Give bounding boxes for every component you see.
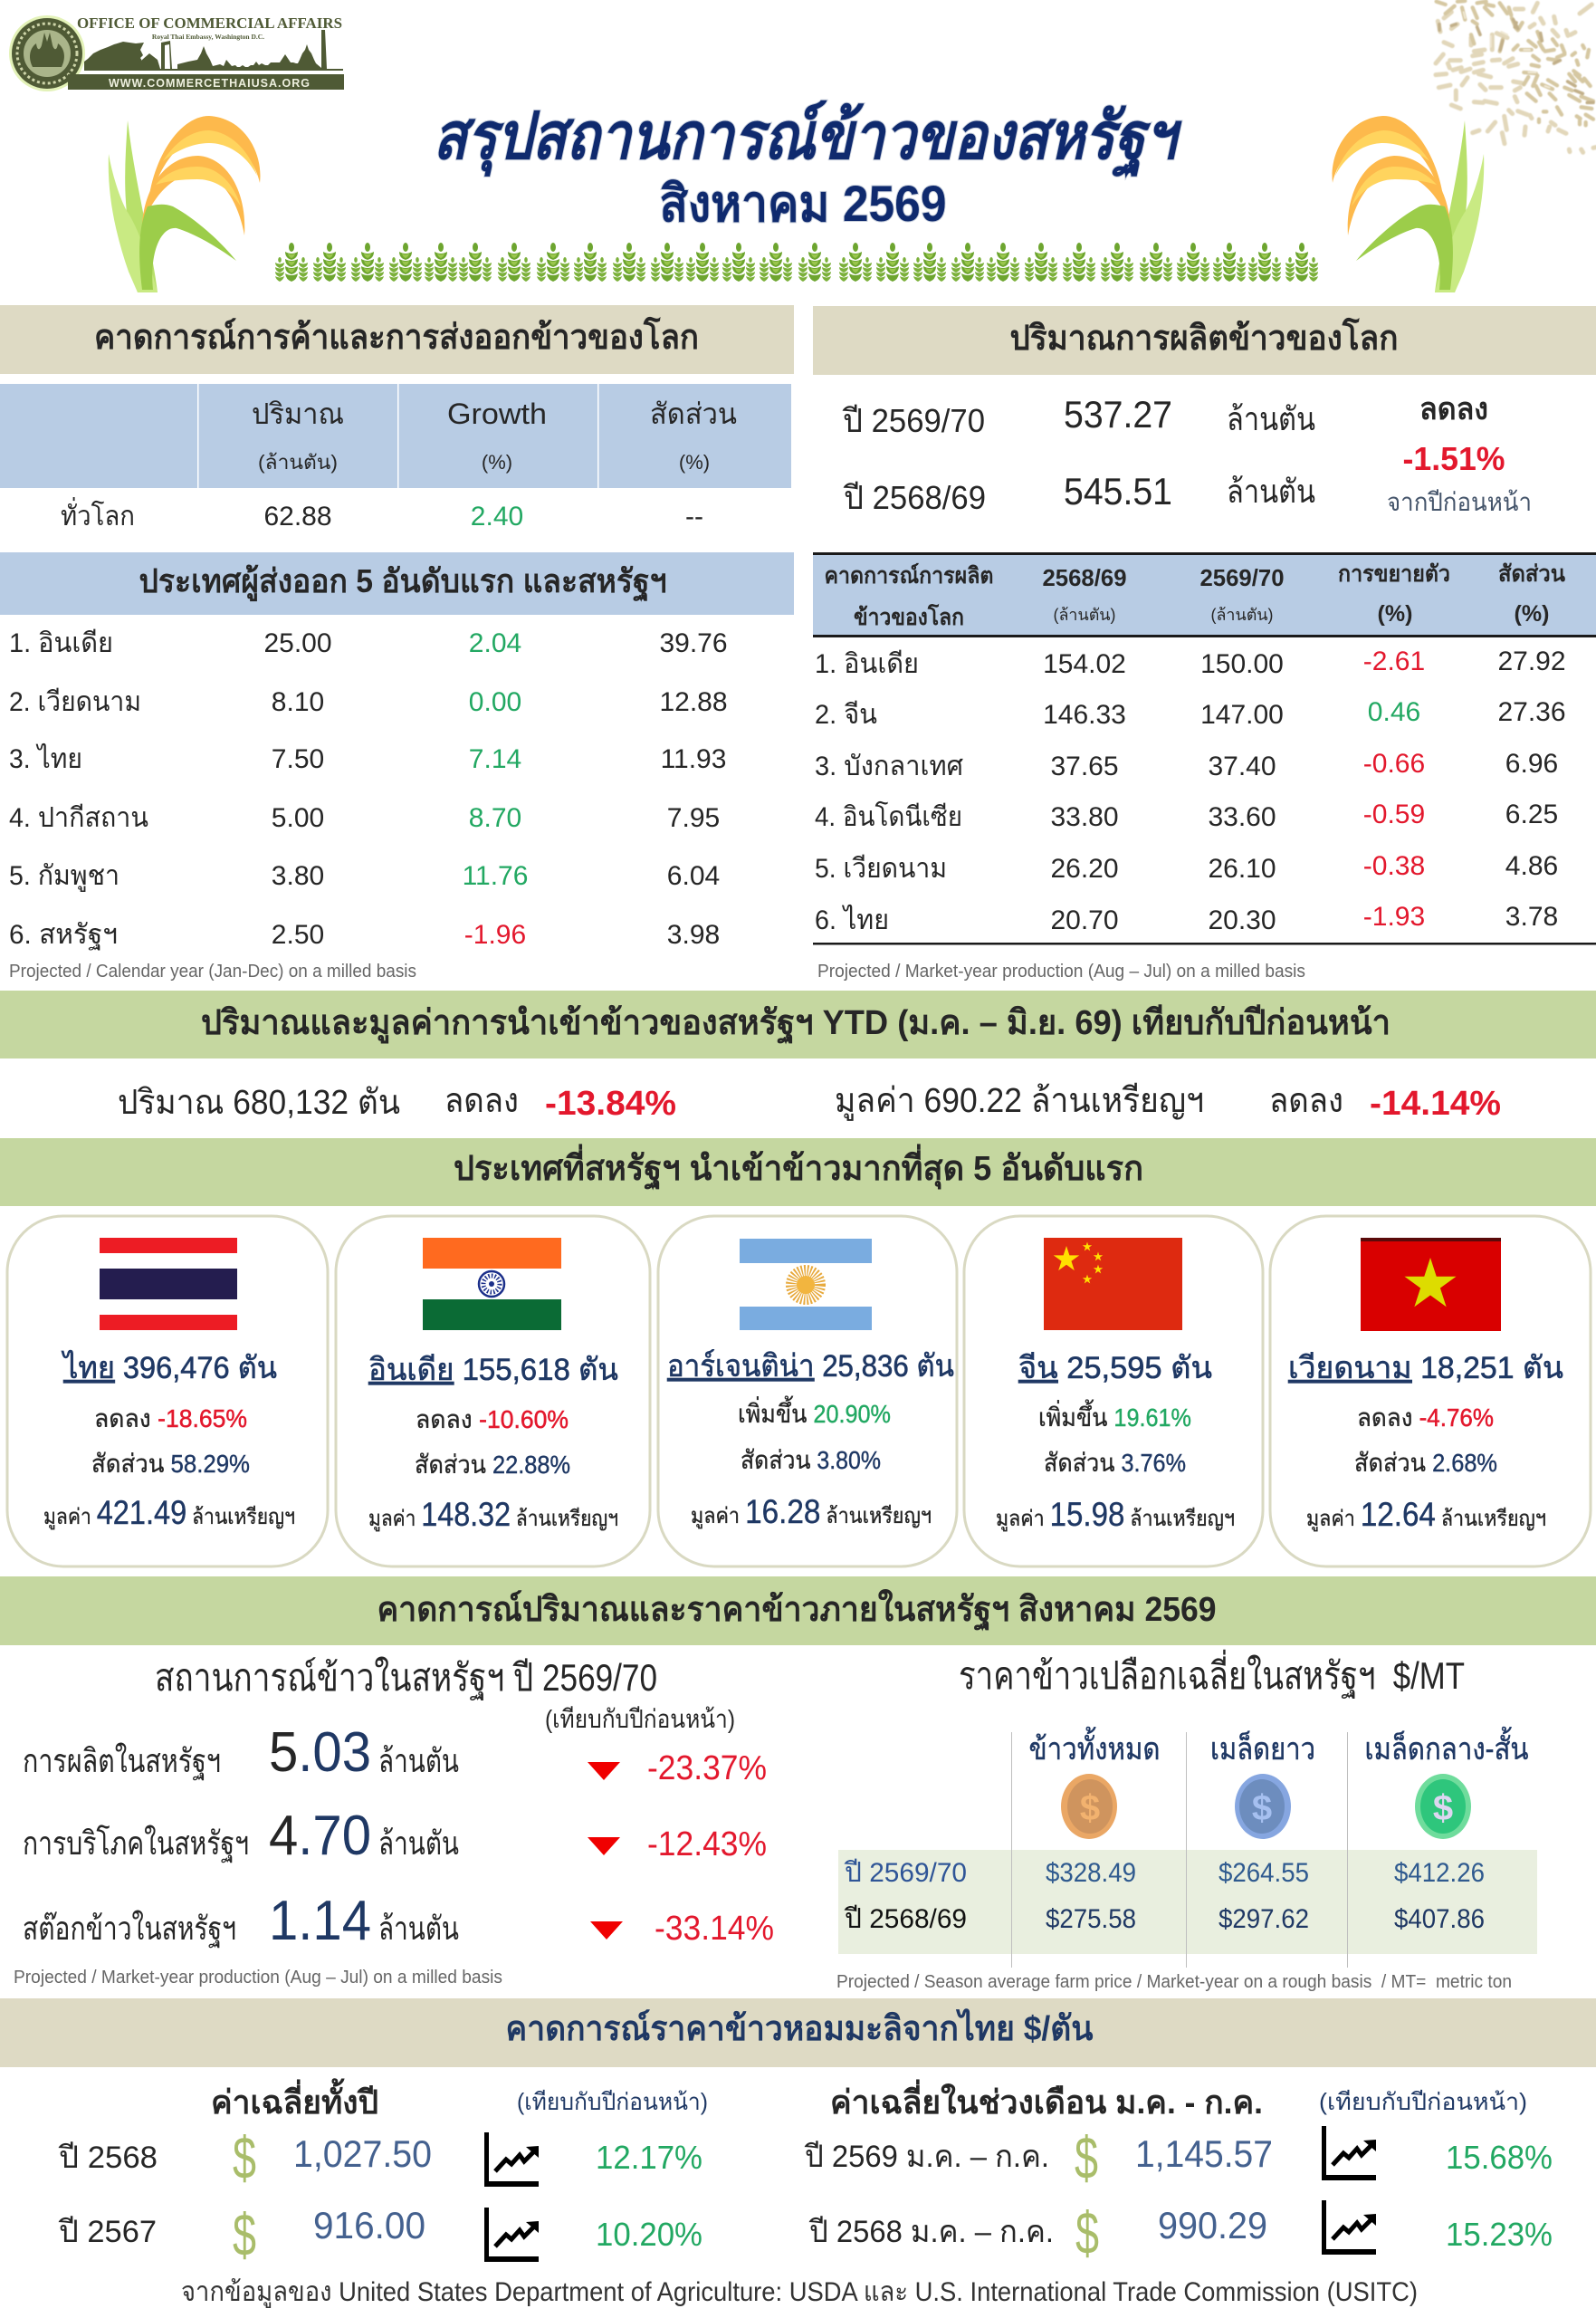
production table rows: 6.96 <box>1505 749 1558 779</box>
icon: left rice plant <box>109 116 260 292</box>
row: 2567 annual: 916.00 <box>313 2204 425 2246</box>
footnote: Projected / Market-year production (Aug – Jul) on a milled basis <box>14 1968 502 1988</box>
title: สรุปสถานการณ์ข้าวของสหรัฐฯ <box>433 100 1182 178</box>
card: Argentina: มูลค่า 16.28 ล้านเหรียญฯ <box>691 1493 932 1530</box>
world row: 2.40 <box>471 502 523 532</box>
flag: Thailand <box>100 1238 237 1330</box>
heading band: US rice forecast <box>0 1576 1596 1645</box>
icon: growth chart <box>1322 2200 1376 2255</box>
icon: scattered rice grains <box>1436 1 1596 152</box>
panel: top 5 import sources <box>0 1138 1596 1566</box>
card: Vietnam <box>1270 1216 1591 1566</box>
production summary: 537.27 <box>1064 393 1172 436</box>
icon: bronze coin <box>1061 1774 1117 1839</box>
production table rows: 33.80 <box>1050 802 1119 832</box>
row: 2568 annual: 1,027.50 <box>293 2132 432 2175</box>
price rows: $264.55 <box>1219 1858 1309 1888</box>
production table rows: 1. อินเดีย <box>815 649 919 679</box>
production summary: ปี 2569/70 <box>842 402 985 439</box>
column dividers <box>1011 1732 1348 1968</box>
icon: growth chart <box>484 2132 539 2187</box>
production table rows: -0.66 <box>1363 749 1425 779</box>
row: stocks: 1.14 <box>269 1890 371 1952</box>
row: consumption: ล้านตัน <box>378 1825 459 1862</box>
card: Thailand: ไทย 396,476 ตัน <box>61 1350 277 1385</box>
card: China: เพิ่มขึ้น 19.61% <box>1038 1399 1191 1432</box>
exporters table: 2.04 <box>469 628 521 658</box>
flag: China <box>1044 1238 1182 1330</box>
row: 2567 annual <box>58 2201 702 2268</box>
heading: ปริมาณการผลิตข้าวของโลก <box>1010 317 1398 358</box>
full-year comparison label: (เทียบกับปีก่อนหน้า) <box>517 2088 708 2115</box>
production table header <box>813 552 1596 637</box>
production table rows: 4.86 <box>1505 851 1558 881</box>
production table rows: 3. บังกลาเทศ <box>815 752 963 781</box>
card: Thailand: มูลค่า 421.49 ล้านเหรียญฯ <box>43 1494 295 1531</box>
row: 2568 annual: ปี 2568 <box>58 2141 158 2175</box>
exporters table: 1. อินเดีย <box>9 628 113 658</box>
card: Thailand: ลดลง -18.65% <box>94 1404 247 1432</box>
exporters table: 25.00 <box>263 628 332 658</box>
production table rows: 150.00 <box>1200 649 1284 679</box>
icon: bronze coin: $ <box>1080 1788 1100 1828</box>
row: 2568 annual: $ <box>233 2124 256 2191</box>
production summary: 545.51 <box>1064 470 1172 512</box>
production table rows: 147.00 <box>1200 700 1284 730</box>
row: 2567 annual: $ <box>233 2201 256 2268</box>
exporters table: -1.96 <box>464 920 526 950</box>
row: 2568 Jan-Jul: ปี 2568 ม.ค. – ก.ค. <box>808 2215 1054 2249</box>
card: Argentina: สัดส่วน 3.80% <box>741 1446 881 1474</box>
footnote: Projected / Season average farm price / Market-year on a rough basis / MT= metric ton <box>836 1972 1512 1992</box>
production table header: 2569/70 <box>1200 564 1284 591</box>
imports volume and value: ปริมาณ 680,132 ตัน <box>118 1084 400 1122</box>
panel: Thai jasmine rice price forecast <box>0 1998 1596 2268</box>
row: production: 5.03 <box>269 1721 371 1784</box>
sub heading: ประเทศผู้ส่งออก 5 อันดับแรก และสหรัฐฯ <box>139 562 666 602</box>
heading band <box>0 1998 1596 2067</box>
production table rows: 27.92 <box>1497 647 1566 676</box>
world row <box>61 497 703 532</box>
price rows: $275.58 <box>1046 1904 1136 1934</box>
heading: ประเทศที่สหรัฐฯ นำเข้าข้าวมากที่สุด 5 อันดับแรก <box>454 1144 1143 1191</box>
icon: right rice plant <box>1333 116 1484 292</box>
card: Argentina <box>658 1216 957 1566</box>
row: production <box>23 1721 767 1787</box>
panel: US paddy prices <box>836 1650 1537 1992</box>
exporters table: 5. กัมพูชา <box>9 861 119 892</box>
row: stocks: -33.14% <box>655 1910 774 1948</box>
production table header: (%) <box>1515 601 1549 627</box>
production table rows: 6.25 <box>1505 800 1558 829</box>
card: Thailand: สัดส่วน 58.29% <box>91 1450 250 1478</box>
production table rows: 3.78 <box>1505 902 1558 932</box>
imports volume and value <box>118 1082 1501 1123</box>
imports volume and value: -14.14% <box>1370 1085 1501 1123</box>
exporters table: 39.76 <box>659 628 728 658</box>
production table header: ข้าวของโลก <box>854 603 964 630</box>
flag: India <box>423 1238 561 1330</box>
heading band <box>0 305 794 374</box>
production summary: ล้านตัน <box>1227 473 1315 510</box>
card: India: ลดลง -10.60% <box>416 1405 569 1433</box>
row: 2569 Jan-Jul: ปี 2569 ม.ค. – ก.ค. <box>804 2140 1049 2174</box>
row: 2569 Jan-Jul: 1,145.57 <box>1135 2132 1273 2175</box>
row: consumption: การบริโภคในสหรัฐฯ <box>23 1825 249 1863</box>
exporters table: 2. เวียดนาม <box>9 687 141 717</box>
table header: สัดส่วน <box>650 398 737 430</box>
table header: Growth <box>447 398 547 430</box>
production summary: ปี 2568/69 <box>843 479 986 516</box>
panel: US rice situation <box>14 1656 774 1988</box>
exporters table: 8.70 <box>469 803 521 833</box>
exporters table: 5.00 <box>272 803 324 833</box>
card: Thailand <box>7 1216 328 1566</box>
row: 2568 Jan-Jul: 990.29 <box>1158 2204 1267 2246</box>
row: production: การผลิตในสหรัฐฯ <box>23 1742 221 1781</box>
row: 2567 annual: ปี 2567 <box>58 2215 157 2249</box>
exporters table: 3.98 <box>667 920 720 950</box>
full-year subheading: ค่าเฉลี่ยทั้งปี <box>211 2078 378 2121</box>
production table rows: 37.65 <box>1050 752 1119 781</box>
row: 2569 Jan-Jul: 15.68% <box>1446 2139 1553 2176</box>
production summary: -1.51% <box>1403 440 1505 477</box>
row: production: -23.37% <box>647 1749 767 1787</box>
row: consumption: -12.43% <box>647 1825 767 1863</box>
exporters table: 7.95 <box>667 803 720 833</box>
sub heading band <box>0 552 794 615</box>
icon: growth chart <box>1322 2126 1376 2180</box>
card: India: อินเดีย 155,618 ตัน <box>368 1353 618 1387</box>
price rows: $297.62 <box>1219 1904 1309 1934</box>
production table rows: -0.38 <box>1363 851 1425 881</box>
decorative rice sprout row <box>275 243 1318 282</box>
exporters table: 2.50 <box>272 920 324 950</box>
price table background <box>838 1850 1537 1954</box>
logo: Office of Commercial Affairs <box>9 14 344 91</box>
exporters table: 11.76 <box>463 861 528 891</box>
icon: green coin <box>1415 1774 1471 1839</box>
exporters table: 7.50 <box>272 744 324 774</box>
heading band <box>0 1138 1596 1206</box>
card: Vietnam: ลดลง -4.76% <box>1357 1403 1494 1432</box>
row: 2568 annual: 12.17% <box>596 2139 702 2176</box>
production table rows: 4. อินโดนีเซีย <box>815 800 962 832</box>
card: China: จีน 25,595 ตัน <box>1018 1351 1212 1385</box>
heading: ปริมาณและมูลค่าการนำเข้าข้าวของสหรัฐฯ YTD (ม.ค. – มิ.ย. 69) เทียบกับปีก่อนหน้า <box>201 1004 1391 1045</box>
footnote: Projected / Calendar year (Jan-Dec) on a milled basis <box>9 962 416 982</box>
heading: US rice forecast: คาดการณ์ปริมาณและราคาข้าวภายในสหรัฐฯ สิงหาคม 2569 <box>377 1589 1217 1632</box>
column headings: เมล็ดกลาง-สั้น <box>1365 1727 1528 1767</box>
footnote: Projected / Market-year production (Aug – Jul) on a milled basis <box>817 962 1305 982</box>
row: production: ล้านตัน <box>378 1742 459 1779</box>
row: stocks: สต๊อกข้าวในสหรัฐฯ <box>23 1910 236 1949</box>
comparison label: (เทียบกับปีก่อนหน้า) <box>545 1705 735 1733</box>
production summary <box>842 392 1532 516</box>
icon: blue coin <box>1235 1774 1291 1839</box>
production summary: จากปีก่อนหน้า <box>1387 488 1532 516</box>
flag: Argentina <box>740 1239 872 1330</box>
row: consumption: 4.70 <box>269 1805 371 1867</box>
card: China: สัดส่วน 3.76% <box>1044 1449 1186 1477</box>
production table rows: -0.59 <box>1363 800 1425 829</box>
row: 2568 Jan-Jul: 15.23% <box>1446 2216 1553 2253</box>
production table header: (%) <box>1378 601 1412 627</box>
table header: (%) <box>482 451 512 474</box>
price rows <box>844 1858 1485 1934</box>
logo seal <box>9 15 85 91</box>
panel: world rice production <box>813 306 1596 982</box>
exporters table: 3. ไทย <box>9 742 82 774</box>
exporters table: 6.04 <box>667 861 720 891</box>
flag: Vietnam <box>1361 1238 1501 1331</box>
imports volume and value: มูลค่า 690.22 ล้านเหรียญฯ <box>835 1082 1204 1121</box>
icon: growth chart <box>484 2208 539 2262</box>
price rows: ปี 2568/69 <box>844 1904 967 1934</box>
source line: จากข้อมูลของ United States Department of Agriculture: USDA และ U.S. International Trade Commission (USITC) <box>181 2277 1418 2308</box>
card: India: สัดส่วน 22.88% <box>415 1451 570 1479</box>
table header: (%) <box>679 451 710 474</box>
panel: US rice imports YTD <box>0 991 1596 1123</box>
production table header: (ล้านตัน) <box>1054 606 1115 624</box>
production table rows: 33.60 <box>1208 802 1276 832</box>
production table header: คาดการณ์การผลิต <box>824 562 994 589</box>
production table header: (ล้านตัน) <box>1211 606 1273 624</box>
logo website bar <box>68 74 344 90</box>
exporters table: 12.88 <box>659 687 728 717</box>
heading band <box>813 306 1596 375</box>
imports volume and value: ลดลง <box>1269 1082 1343 1120</box>
price rows: $407.86 <box>1394 1904 1485 1934</box>
column headings <box>1028 1727 1528 1767</box>
production table rows: 26.20 <box>1050 854 1119 884</box>
row: 2569 Jan-Jul: $ <box>1075 2124 1098 2191</box>
logo website: WWW.COMMERCETHAIUSA.ORG <box>109 77 310 90</box>
production table rows: 26.10 <box>1208 854 1276 884</box>
production table header: 2568/69 <box>1043 564 1126 591</box>
production table rows: 27.36 <box>1497 697 1566 727</box>
production table rows: -1.93 <box>1363 902 1425 932</box>
card: China: มูลค่า 15.98 ล้านเหรียญฯ <box>996 1496 1235 1533</box>
card: India <box>336 1216 650 1566</box>
card: Vietnam: สัดส่วน 2.68% <box>1354 1449 1497 1477</box>
row: stocks <box>23 1890 774 1952</box>
production table rows: 6. ไทย <box>815 904 889 935</box>
world row: ทั่วโลก <box>61 497 135 532</box>
exporters table: 4. ปากีสถาน <box>9 803 148 833</box>
production table rows: 20.70 <box>1050 905 1119 935</box>
imports volume and value: -13.84% <box>545 1085 676 1123</box>
exporters table: 11.93 <box>661 744 726 774</box>
table header: (ล้านตัน) <box>258 451 338 474</box>
production summary: ลดลง <box>1419 392 1488 426</box>
panel: world rice trade and export forecast <box>0 305 794 982</box>
row: 2568 Jan-Jul <box>808 2199 1553 2266</box>
row: 2568 annual <box>58 2124 702 2191</box>
table header: ปริมาณ <box>252 398 344 430</box>
logo heading: OFFICE OF COMMERCIAL AFFAIRS <box>77 14 342 32</box>
logo skyline <box>84 30 327 69</box>
imports volume and value: ลดลง <box>444 1082 519 1120</box>
logo sub heading: Royal Thai Embassy, Washington D.C. <box>152 33 264 41</box>
exporters table: 0.00 <box>469 687 521 717</box>
row: 2567 annual: 10.20% <box>596 2216 702 2253</box>
column headings: เมล็ดยาว <box>1210 1730 1315 1767</box>
row: stocks: ล้านตัน <box>378 1910 459 1947</box>
exporters table: 3.80 <box>272 861 324 891</box>
heading: ราคาข้าวเปลือกเฉลี่ยในสหรัฐฯ $/MT <box>959 1650 1465 1699</box>
table header <box>0 384 791 488</box>
heading: สถานการณ์ข้าวในสหรัฐฯ ปี 2569/70 <box>155 1656 657 1700</box>
period comparison label: (เทียบกับปีก่อนหน้า) <box>1319 2088 1527 2115</box>
card: Vietnam: เวียดนาม 18,251 ตัน <box>1288 1351 1563 1385</box>
production table rows: 154.02 <box>1043 649 1126 679</box>
exporters table <box>9 628 728 951</box>
exporters table: 6. สหรัฐฯ <box>9 920 118 951</box>
icon: green coin: $ <box>1433 1788 1453 1828</box>
card: China <box>964 1216 1263 1566</box>
price rows: ปี 2569/70 <box>844 1858 967 1888</box>
price rows: $412.26 <box>1394 1858 1485 1888</box>
production table header: การขยายตัว <box>1338 561 1450 587</box>
world row: -- <box>685 502 703 532</box>
production table rows: 5. เวียดนาม <box>815 854 947 884</box>
card: Argentina: เพิ่มขึ้น 20.90% <box>738 1395 891 1428</box>
card: India: มูลค่า 148.32 ล้านเหรียญฯ <box>368 1496 618 1533</box>
production summary: ล้านตัน <box>1227 400 1315 437</box>
production table rows <box>813 647 1596 945</box>
row: consumption <box>23 1805 767 1867</box>
production table rows: 146.33 <box>1043 700 1126 730</box>
card: Vietnam: มูลค่า 12.64 ล้านเหรียญฯ <box>1306 1496 1546 1533</box>
production table rows: 2. จีน <box>815 700 877 730</box>
price rows: $328.49 <box>1046 1858 1136 1888</box>
heading: คาดการณ์การค้าและการส่งออกข้าวของโลก <box>94 316 699 357</box>
production table rows: 0.46 <box>1368 697 1420 727</box>
subtitle: สิงหาคม 2569 <box>659 175 947 232</box>
production table rows: -2.61 <box>1363 647 1425 676</box>
heading band <box>0 991 1596 1058</box>
exporters table: 7.14 <box>469 744 521 774</box>
world row: 62.88 <box>263 502 332 532</box>
production table rows: 20.30 <box>1208 905 1276 935</box>
row: 2568 Jan-Jul: $ <box>1075 2199 1099 2266</box>
card: Argentina: อาร์เจนติน่า 25,836 ตัน <box>667 1349 954 1384</box>
row: 2569 Jan-Jul <box>804 2124 1553 2191</box>
period subheading: ค่าเฉลี่ยในช่วงเดือน ม.ค. - ก.ค. <box>830 2079 1263 2121</box>
heading: คาดการณ์ราคาข้าวหอมมะลิจากไทย $/ตัน <box>505 2008 1094 2048</box>
column headings: ข้าวทั้งหมด <box>1028 1727 1161 1767</box>
icon: blue coin: $ <box>1252 1788 1272 1828</box>
production table header: สัดส่วน <box>1498 561 1565 587</box>
production table rows: 37.40 <box>1208 752 1276 781</box>
exporters table: 8.10 <box>272 687 324 717</box>
